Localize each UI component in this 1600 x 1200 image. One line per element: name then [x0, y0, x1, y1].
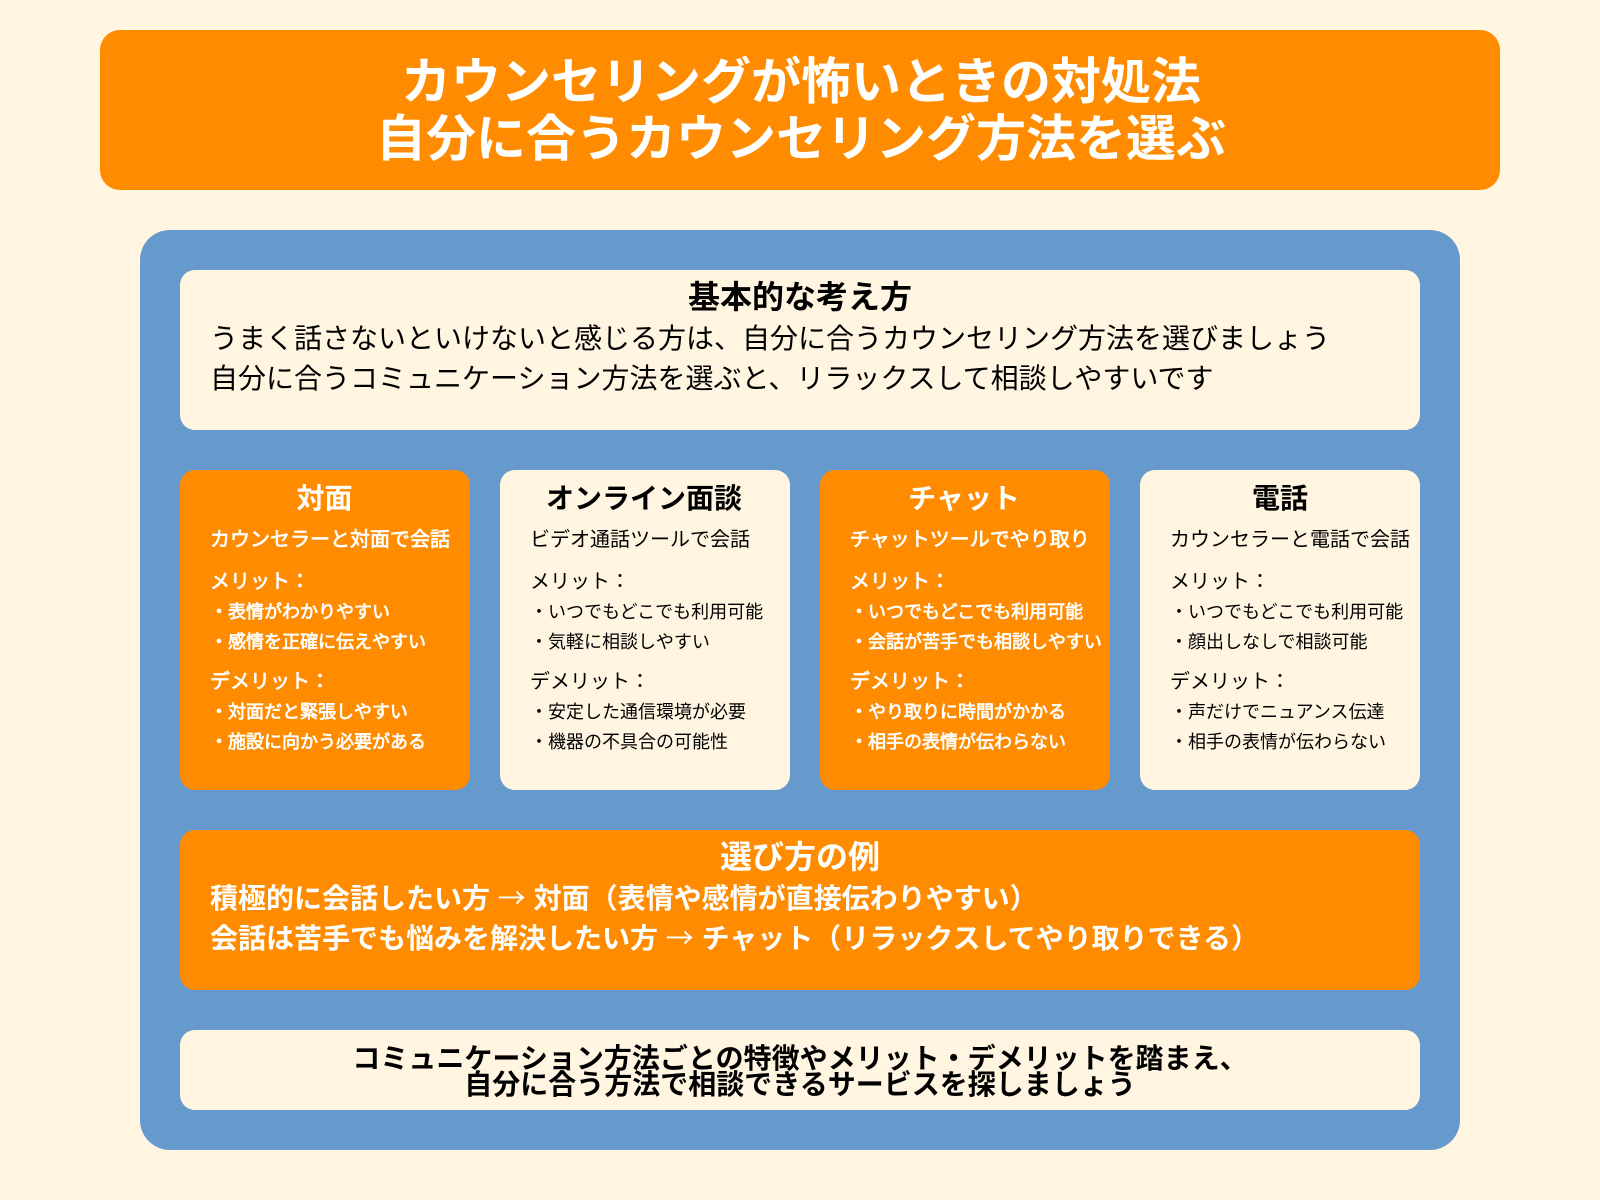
merit label: メリット：	[1170, 571, 1270, 593]
demerit item 1: ・やり取りに時間がかかる	[850, 702, 1066, 722]
panel: conclusion	[180, 1030, 1420, 1110]
panel: online interview card	[500, 470, 790, 790]
demerit item 2: ・相手の表情が伝わらない	[1170, 732, 1386, 752]
example line 1: 積極的に会話したい方 → 対面（表情や感情が直接伝わりやすい）	[210, 877, 1038, 917]
demerit item 1: ・安定した通信環境が必要	[530, 702, 746, 722]
merit item 2: ・顔出しなしで相談可能	[1170, 632, 1367, 652]
merit item 1: ・いつでもどこでも利用可能	[850, 602, 1083, 622]
demerit label: デメリット：	[530, 671, 650, 693]
card heading: チャット	[908, 483, 1020, 514]
merit item 2: ・感情を正確に伝えやすい	[210, 632, 426, 652]
merit label: メリット：	[530, 571, 630, 593]
panel: main blue container	[140, 230, 1460, 1150]
demerit label: デメリット：	[850, 671, 970, 693]
example line 2: 会話は苦手でも悩みを解決したい方 → チャット（リラックスしてやり取りできる）	[210, 917, 1259, 957]
card heading: 電話	[1252, 483, 1308, 514]
merit item 2: ・気軽に相談しやすい	[530, 632, 710, 652]
conclusion line 2: 自分に合う方法で相談できるサービスを探しましょう	[464, 1069, 1136, 1100]
card description: チャットツールでやり取り	[850, 529, 1090, 551]
demerit item 2: ・相手の表情が伝わらない	[850, 732, 1066, 752]
merit label: メリット：	[850, 571, 950, 593]
title line 1: カウンセリングが怖いときの対処法	[401, 54, 1201, 110]
card description: ビデオ通話ツールで会話	[530, 529, 750, 551]
merit item 1: ・いつでもどこでも利用可能	[1170, 602, 1403, 622]
heading: selection examples: 選び方の例	[720, 839, 880, 875]
demerit item 2: ・機器の不具合の可能性	[530, 732, 728, 752]
merit item 2: ・会話が苦手でも相談しやすい	[850, 632, 1102, 652]
demerit item 1: ・対面だと緊張しやすい	[210, 702, 408, 722]
demerit label: デメリット：	[1170, 671, 1290, 693]
card description: カウンセラーと対面で会話	[210, 529, 450, 551]
demerit label: デメリット：	[210, 671, 330, 693]
panel: basic approach	[180, 270, 1420, 430]
panel: phone card	[1140, 470, 1420, 790]
card heading: 対面	[296, 483, 353, 514]
heading: basic approach: 基本的な考え方	[688, 279, 912, 315]
card description: カウンセラーと電話で会話	[1170, 529, 1410, 551]
merit label: メリット：	[210, 571, 310, 593]
text: basic approach line 1: うまく話さないといけないと感じる方は、自分に合うカウンセリング方法を選びましょう	[210, 323, 1330, 354]
panel: chat card	[820, 470, 1110, 790]
text: basic approach line 2: 自分に合うコミュニケーション方法を選ぶと、リラックスして相談しやすいです	[210, 363, 1214, 394]
panel: face to face card	[180, 470, 470, 790]
merit item 1: ・いつでもどこでも利用可能	[530, 602, 763, 622]
title line 2: 自分に合うカウンセリング方法を選ぶ	[376, 111, 1226, 167]
title banner	[100, 30, 1500, 190]
demerit item 2: ・施設に向かう必要がある	[210, 732, 426, 752]
card heading: オンライン面談	[546, 483, 742, 514]
demerit item 1: ・声だけでニュアンス伝達	[1170, 702, 1385, 722]
panel: selection examples	[180, 830, 1420, 990]
conclusion line 1: コミュニケーション方法ごとの特徴やメリット・デメリットを踏まえ、	[352, 1042, 1248, 1074]
merit item 1: ・表情がわかりやすい	[210, 602, 390, 622]
